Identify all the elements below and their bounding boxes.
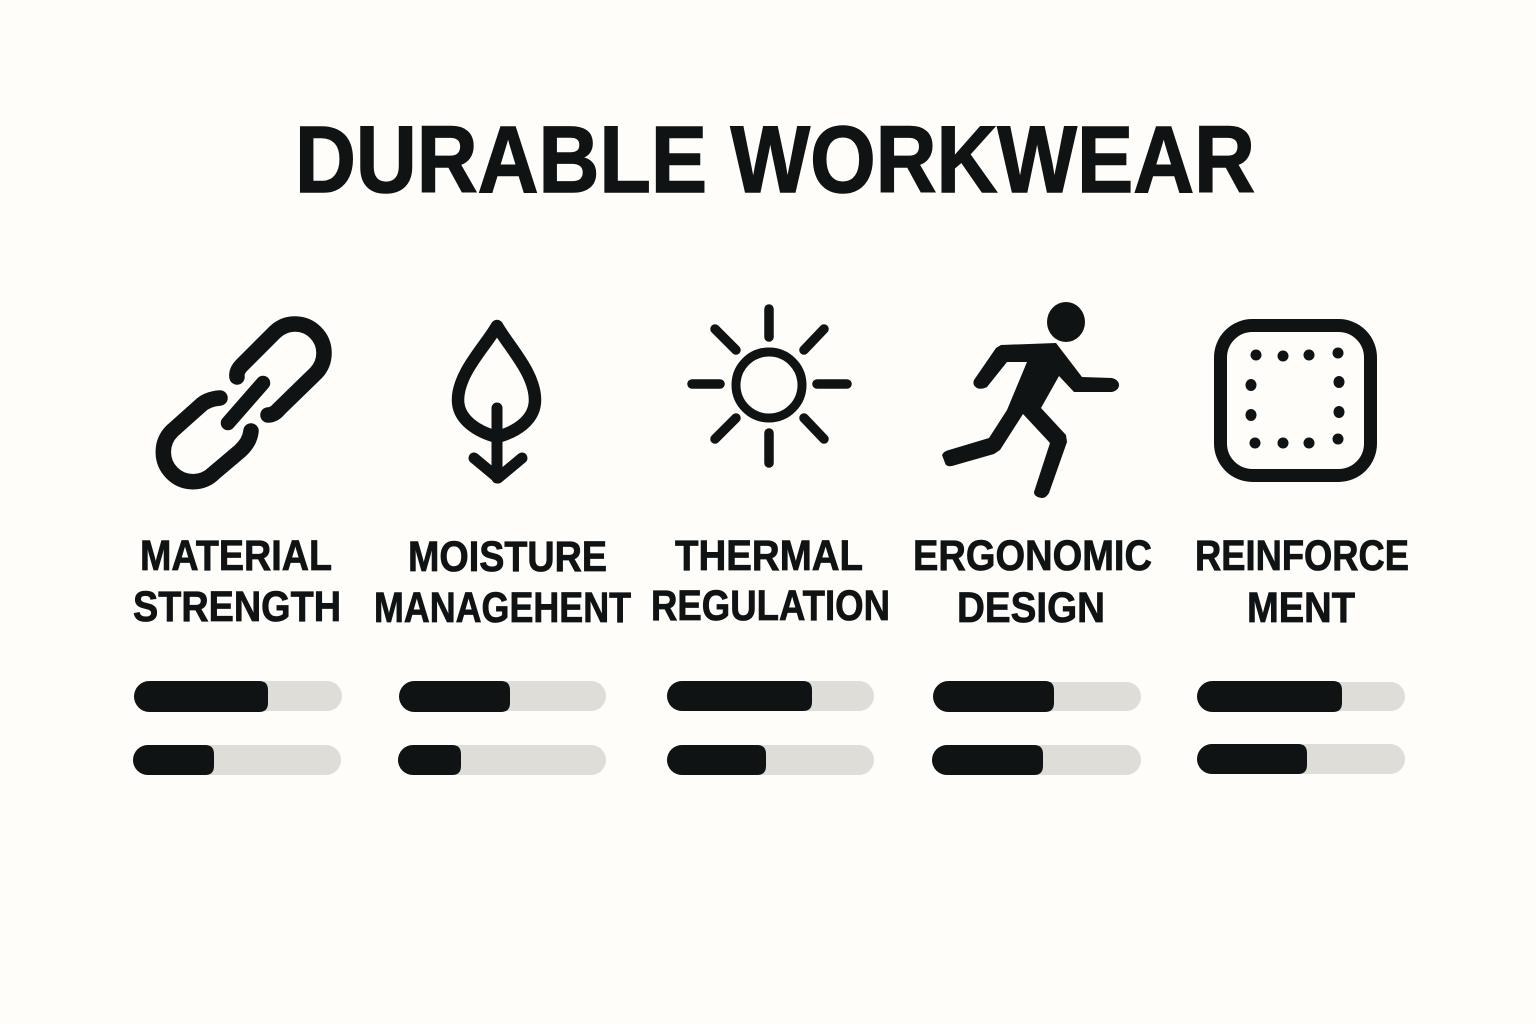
label: moisture management: MANAGEHENT [374,584,631,632]
bars: material strength [133,681,342,775]
bars: ergonomic design [932,681,1141,775]
label: material strength: MATERIAL [140,532,332,580]
label: reinforcement: REINFORCE [1195,532,1409,580]
icon: sun [692,309,847,463]
bars: thermal regulation [667,681,874,775]
bars: moisture management [398,681,606,775]
title: DURABLE WORKWEAR [295,107,1255,213]
label: thermal regulation: THERMAL [675,532,863,580]
icon: running figure [942,302,1119,498]
label: thermal regulation: REGULATION [651,582,890,630]
label: ergonomic design: ERGONOMIC [913,532,1152,580]
icon: chain link [163,324,324,482]
bars: reinforcement [1197,681,1405,774]
label: reinforcement [1195,532,1409,632]
label: thermal regulation [651,532,890,630]
label: ergonomic design: DESIGN [957,584,1105,632]
label: material strength: STRENGTH [133,583,341,631]
icon: reinforced patch [1220,326,1370,476]
label: ergonomic design [913,532,1152,632]
label: material strength [133,532,341,631]
icon: water drop with arrow [458,326,535,478]
label: reinforcement: MENT [1247,584,1355,632]
label: moisture management [374,533,631,632]
label: moisture management: MOISTURE [408,533,607,581]
